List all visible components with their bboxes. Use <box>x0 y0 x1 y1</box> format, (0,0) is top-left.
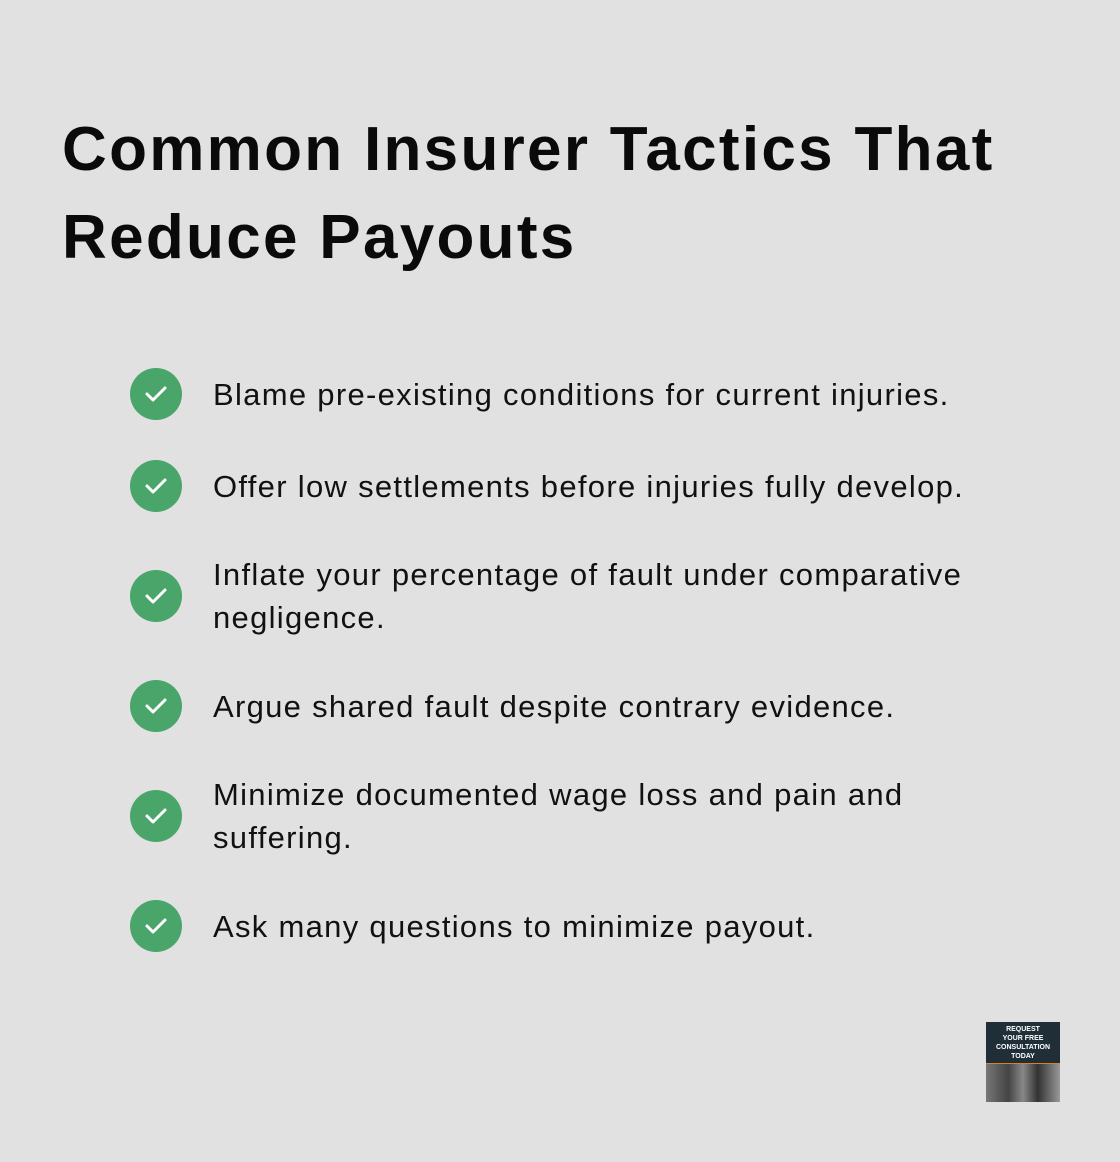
icon: check <box>130 680 182 732</box>
item 5 <box>130 777 903 855</box>
item 4 <box>130 680 895 732</box>
item 2 <box>130 460 964 512</box>
item 2: Offer low settlements before injuries fully develop. <box>213 468 964 504</box>
logo: consultation badge: REQUEST <box>1006 1026 1040 1033</box>
logo: consultation badge: YOUR FREE <box>1003 1035 1043 1042</box>
icon: check <box>130 570 182 622</box>
item 1: Blame pre-existing conditions for current injuries. <box>213 376 950 412</box>
item 5: suffering. <box>213 820 353 855</box>
logo: consultation badge: TODAY <box>1011 1053 1035 1060</box>
icon: check <box>130 790 182 842</box>
logo: consultation badge <box>986 1022 1060 1102</box>
title: Reduce Payouts <box>62 203 577 272</box>
icon: check <box>130 900 182 952</box>
item 6 <box>130 900 815 952</box>
item 3: Inflate your percentage of fault under comparative negligence. <box>213 557 962 635</box>
item 5: Minimize documented wage loss and pain and <box>213 777 903 812</box>
title: Common Insurer Tactics That <box>62 115 995 184</box>
logo: consultation badge: CONSULTATION <box>996 1044 1050 1051</box>
icon: check <box>130 460 182 512</box>
icon: check <box>130 368 182 420</box>
item 6: Ask many questions to minimize payout. <box>213 908 815 944</box>
item 1 <box>130 368 950 420</box>
item 4: Argue shared fault despite contrary evidence. <box>213 688 895 724</box>
title <box>62 115 995 272</box>
